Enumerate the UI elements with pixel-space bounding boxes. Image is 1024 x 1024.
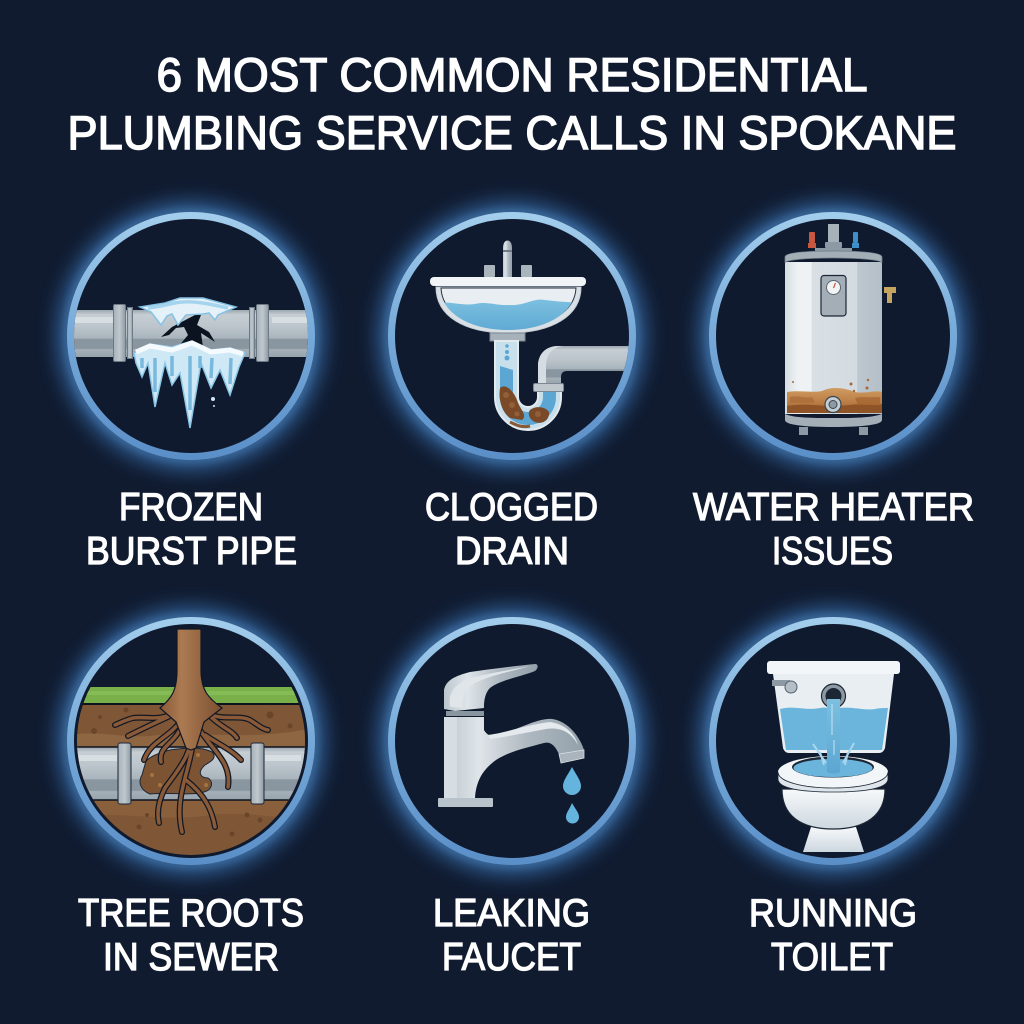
panel: clogged drain	[387, 211, 637, 573]
title: 6 MOST COMMON RESIDENTIAL	[156, 48, 868, 101]
label: water heater issues: ISSUES	[772, 530, 893, 573]
panel: tree roots in sewer	[66, 616, 316, 979]
label: clogged drain: DRAIN	[455, 530, 569, 573]
panel: water heater issues	[693, 211, 974, 573]
panel: leaking faucet	[387, 616, 637, 979]
label: clogged drain	[425, 486, 598, 573]
label: frozen burst pipe	[86, 486, 297, 573]
glow ring	[708, 211, 958, 461]
icon: faucet	[438, 664, 584, 824]
label: leaking faucet: LEAKING	[433, 892, 590, 935]
label: leaking faucet: FAUCET	[442, 936, 581, 979]
label: tree roots in sewer: TREE ROOTS	[78, 892, 304, 935]
label: clogged drain: CLOGGED	[425, 486, 598, 529]
label: frozen burst pipe: FROZEN	[119, 486, 263, 529]
panel: frozen burst pipe	[66, 211, 316, 573]
panel: running toilet	[708, 616, 958, 979]
glow ring	[387, 616, 637, 866]
icon: clogged sink	[430, 240, 635, 430]
label: water heater issues: WATER HEATER	[693, 486, 974, 529]
icon: toilet	[767, 661, 900, 852]
label: running toilet: RUNNING	[749, 892, 917, 935]
glow ring	[66, 616, 316, 866]
glow ring	[66, 211, 316, 461]
title	[68, 48, 956, 159]
icon: roots in sewer pipe	[70, 629, 312, 865]
label: running toilet	[749, 892, 917, 979]
label: tree roots in sewer: IN SEWER	[103, 936, 279, 979]
label: frozen burst pipe: BURST PIPE	[86, 530, 297, 573]
trap	[495, 341, 561, 430]
label: water heater issues	[693, 486, 974, 573]
icon: frozen pipe	[70, 298, 312, 428]
icon: water drops	[563, 767, 581, 824]
label: running toilet: TOILET	[771, 936, 893, 979]
glow ring	[387, 211, 637, 461]
icon: water heater	[785, 224, 896, 435]
title: PLUMBING SERVICE CALLS IN SPOKANE	[68, 106, 956, 159]
label: leaking faucet	[433, 892, 590, 979]
label: tree roots in sewer	[78, 892, 304, 979]
glow ring	[708, 616, 958, 866]
